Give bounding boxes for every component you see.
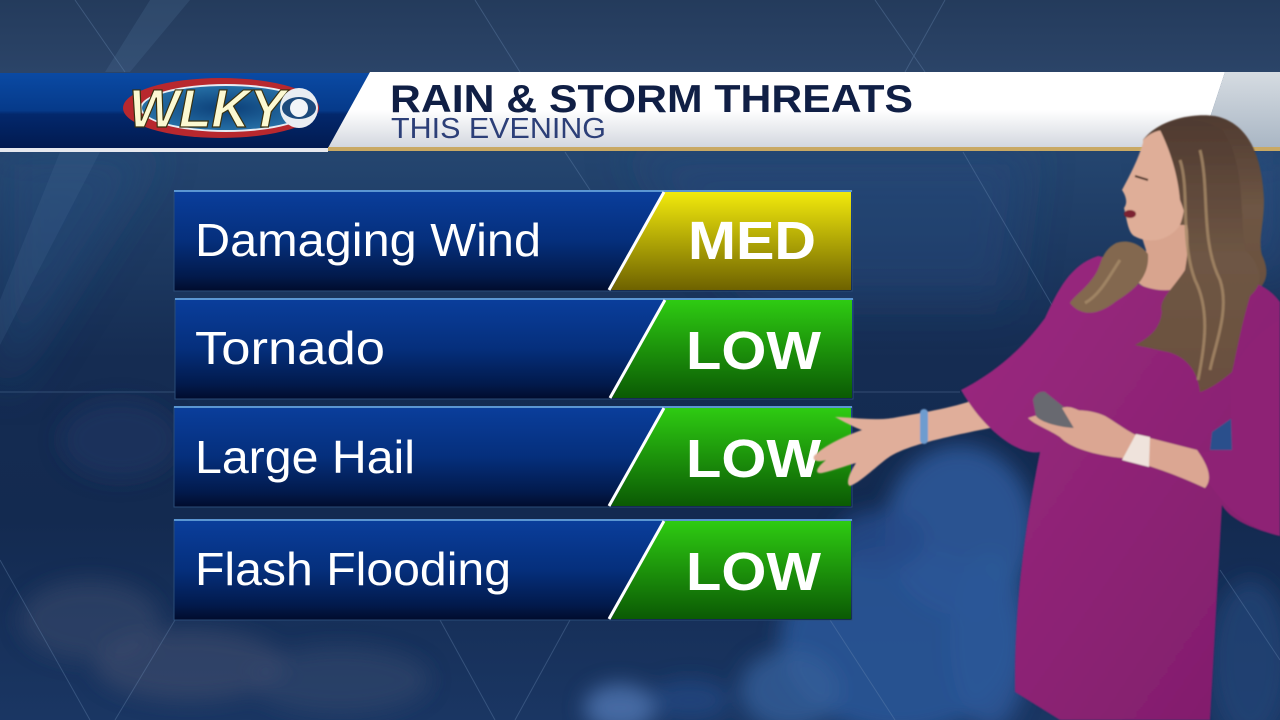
threat row: Tornado LOW: Tornado bbox=[195, 322, 385, 374]
threat row: Damaging Wind MED: MED bbox=[688, 211, 816, 271]
threat row: Flash Flooding LOW: LOW bbox=[686, 542, 821, 602]
right sleeve bell bbox=[1193, 320, 1280, 536]
threat row: Damaging Wind MED bbox=[174, 191, 852, 291]
hair back bbox=[1143, 115, 1266, 300]
watch bbox=[1122, 434, 1150, 467]
threat row: Tornado LOW bbox=[175, 299, 853, 399]
logo: WLKY CBS: WLKY bbox=[129, 79, 290, 139]
hair front strands bbox=[1135, 120, 1260, 392]
threat row: Damaging Wind MED: Damaging Wind bbox=[195, 214, 541, 266]
presenter: woman in magenta dress bbox=[814, 115, 1280, 720]
title: RAIN & STORM THREATS bbox=[390, 78, 913, 121]
blonde highlights bbox=[1085, 150, 1223, 380]
logo panel: blue band bbox=[0, 73, 370, 152]
other forearm bbox=[1028, 410, 1209, 488]
dress body bbox=[961, 256, 1280, 720]
lips bbox=[1124, 210, 1136, 218]
threat row: Large Hail LOW: Large Hail bbox=[195, 431, 415, 483]
blue wristband bbox=[920, 409, 928, 444]
title panel: white band bbox=[328, 72, 1280, 151]
threat row: Large Hail LOW: LOW bbox=[686, 429, 821, 489]
background gap between torso and sleeve bbox=[1210, 418, 1232, 450]
held device bbox=[1033, 392, 1080, 428]
subtitle: THIS EVENING bbox=[391, 113, 606, 145]
left hair wave bbox=[1070, 241, 1148, 313]
fingers over device bbox=[1062, 407, 1095, 430]
neck bbox=[1135, 225, 1196, 292]
threat row: Tornado LOW: LOW bbox=[686, 321, 821, 381]
threat row: Large Hail LOW bbox=[174, 407, 852, 507]
face bbox=[1122, 130, 1185, 240]
extended forearm and hand bbox=[814, 396, 990, 486]
eye and brow bbox=[1135, 176, 1148, 180]
threat row: Flash Flooding LOW bbox=[174, 520, 852, 620]
header band bbox=[0, 72, 1280, 152]
threat row: Flash Flooding LOW: Flash Flooding bbox=[195, 543, 511, 595]
